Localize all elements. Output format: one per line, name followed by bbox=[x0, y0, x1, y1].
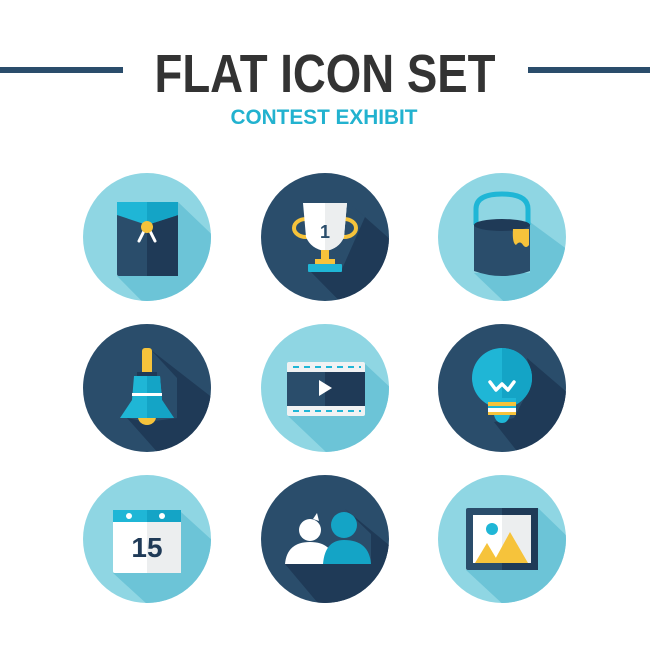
icon: paint bucket bbox=[438, 173, 566, 301]
title: FLAT ICON SET bbox=[154, 44, 496, 104]
icon: light bulb bbox=[438, 324, 566, 452]
icon: video film bbox=[261, 324, 389, 452]
subtitle: CONTEST EXHIBIT bbox=[230, 106, 418, 129]
icon: bell bbox=[83, 324, 211, 452]
icon: calendar bbox=[83, 475, 211, 603]
icon: envelope bbox=[83, 173, 211, 301]
icon: trophy bbox=[261, 173, 389, 301]
icon: trophy: 1 bbox=[320, 222, 330, 242]
header lines bbox=[0, 67, 650, 73]
icon: people bbox=[261, 475, 389, 603]
icon: calendar: 15 bbox=[131, 532, 163, 563]
icon: picture frame bbox=[438, 475, 566, 603]
